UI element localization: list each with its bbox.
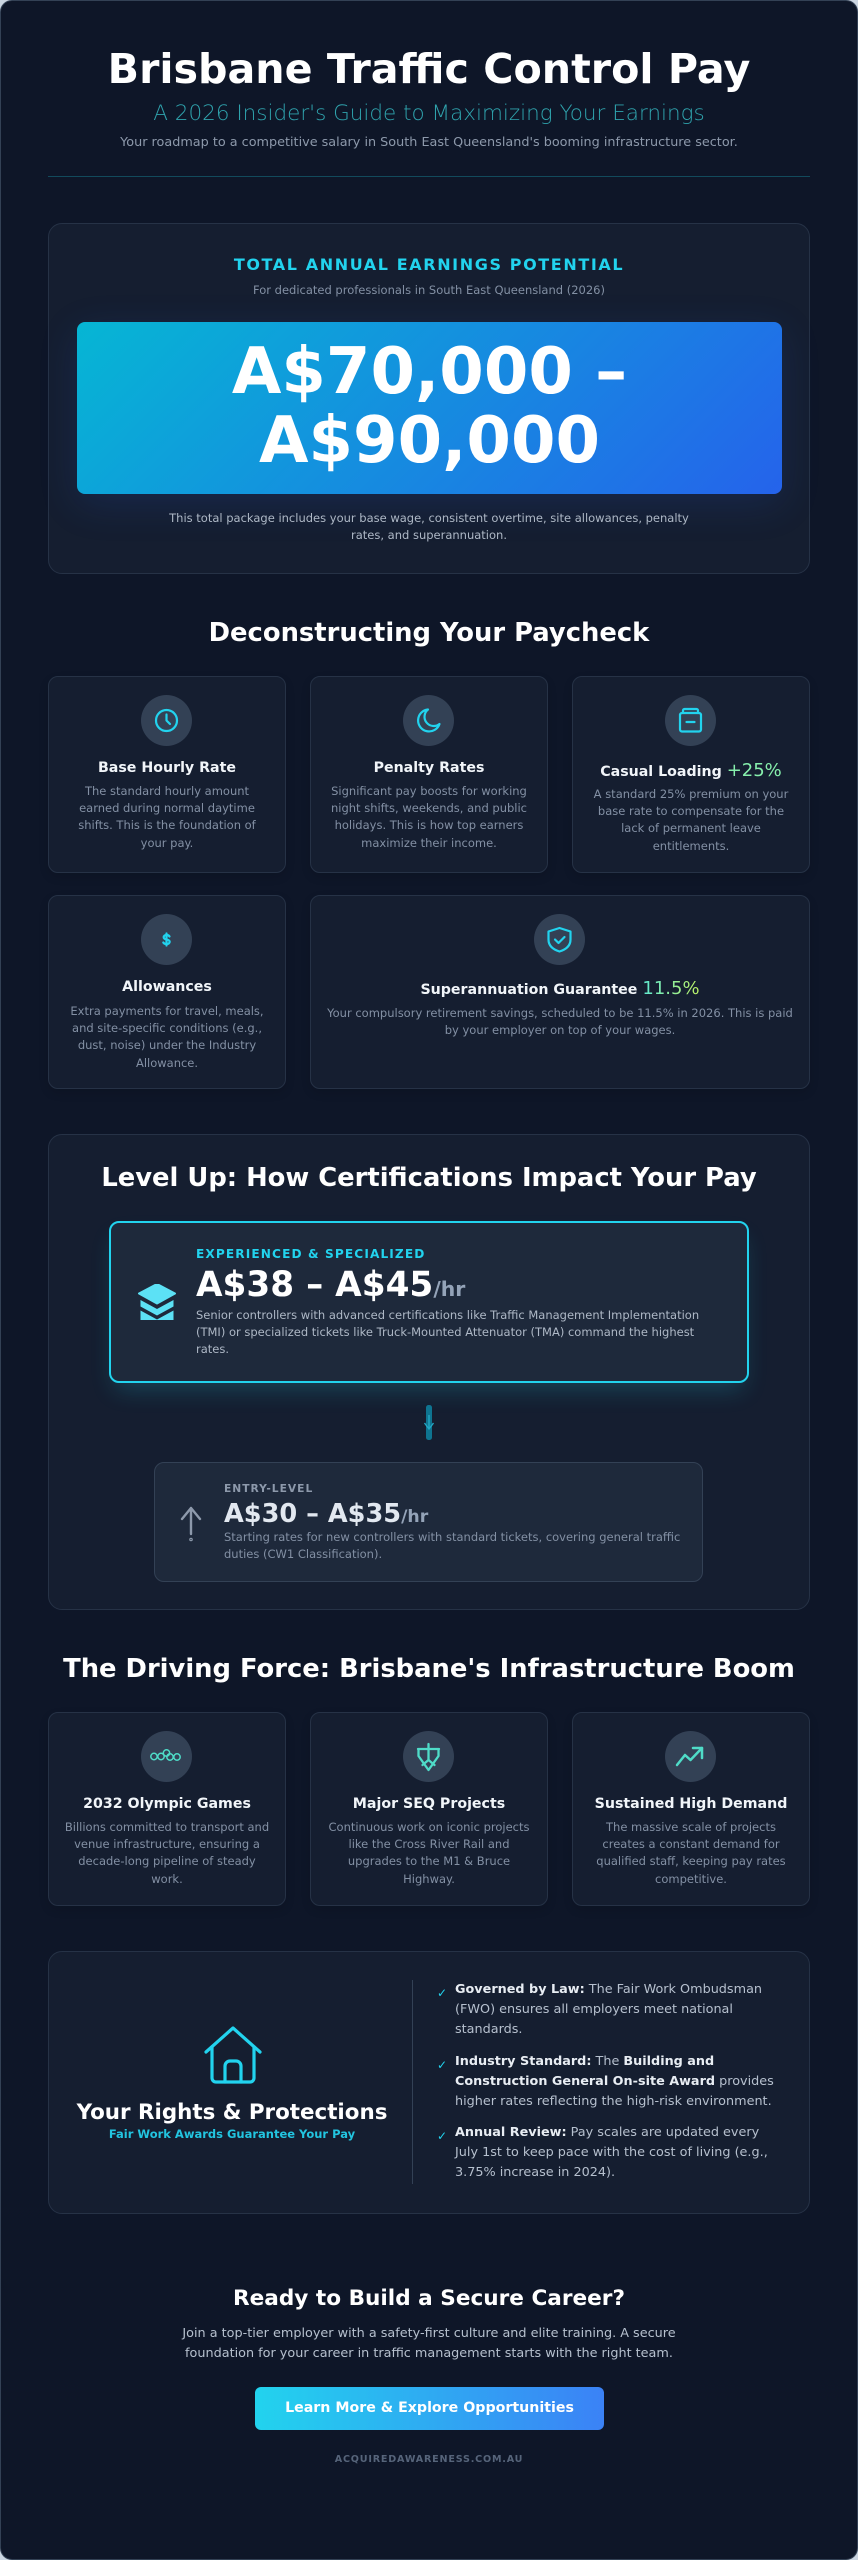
list item: governed by law: (FWO) ensures all employers meet national — [455, 2002, 733, 2017]
list item: governed by law: Governed by Law: The Fair Work Ombudsman — [455, 1982, 762, 1997]
tier description: Starting rates for new controllers with standard tickets, covering general traffic — [224, 1530, 680, 1544]
card description: A standard 25% premium on your — [594, 787, 788, 801]
earnings range banner — [77, 322, 782, 494]
card title: Allowances — [122, 979, 212, 995]
cta heading: Ready to Build a Secure Career? — [233, 2286, 625, 2311]
heading: driving force: The Driving Force: Brisbane's Infrastructure Boom — [63, 1654, 795, 1684]
earnings range figure: A$70,000 – — [232, 335, 627, 409]
list item: industry standard: Industry Standard: The Building and — [455, 2054, 714, 2069]
card description: earned during normal daytime — [79, 801, 255, 815]
tier description: Senior controllers with advanced certifications like Traffic Management Implementation — [196, 1308, 699, 1322]
card description: work. — [151, 1872, 183, 1886]
tier label: EXPERIENCED & SPECIALIZED — [196, 1247, 425, 1261]
rights subheading: Fair Work Awards Guarantee Your Pay — [109, 2127, 355, 2141]
card description — [328, 1820, 530, 1886]
card description — [594, 787, 788, 853]
list item: annual review: 3.75% increase in 2024). — [455, 2165, 615, 2180]
icon: wallet — [665, 695, 716, 746]
earnings range figure: A$90,000 — [259, 404, 600, 478]
cta text: Join a top-tier employer with a safety-first culture and elite training. A secure — [182, 2326, 676, 2341]
icon: house — [204, 2026, 262, 2084]
card: base hourly rate — [48, 676, 286, 873]
earnings label: TOTAL ANNUAL EARNINGS POTENTIAL — [234, 255, 624, 274]
list item: annual review: July 1st to keep pace with the cost of living (e.g., — [455, 2145, 768, 2160]
card description: Extra payments for travel, meals, — [70, 1004, 264, 1018]
card description: qualified staff, keeping pay rates — [596, 1854, 786, 1868]
check mark: ✓ — [437, 2129, 447, 2143]
card description: decade-long pipeline of steady — [78, 1854, 256, 1868]
icon: rings — [141, 1731, 192, 1782]
card: casual loading — [572, 676, 810, 873]
card: olympic games — [48, 1712, 286, 1906]
card description: dust, noise) under the Industry — [78, 1038, 256, 1052]
card: sustained high demand — [572, 1712, 810, 1906]
cta text: foundation for your career in traffic management starts with the right team. — [185, 2346, 673, 2361]
tier: experienced — [109, 1221, 749, 1383]
tier: entry level — [154, 1462, 703, 1582]
icon: crane anchor — [403, 1731, 454, 1782]
list item: governed by law: standards. — [455, 2022, 522, 2037]
card description: Highway. — [403, 1872, 455, 1886]
card description: holidays. This is how top earners — [335, 818, 523, 832]
card description: shifts. This is the foundation of — [78, 818, 256, 832]
earnings sublabel: For dedicated professionals in South East Queensland (2026) — [253, 283, 605, 297]
card description — [327, 1006, 793, 1037]
card description: venue infrastructure, ensuring a — [74, 1837, 260, 1851]
list item: governed by law — [455, 1982, 762, 2037]
card description: lack of permanent leave — [621, 821, 761, 835]
card description: base rate to compensate for the — [598, 804, 784, 818]
card description: and site-specific conditions (e.g., — [72, 1021, 262, 1035]
tagline: Your roadmap to a competitive salary in South East Queensland's booming infrastructure sector. — [120, 135, 738, 150]
cta button — [255, 2387, 604, 2430]
card title: Major SEQ Projects — [353, 1796, 505, 1812]
card description — [596, 1820, 786, 1886]
heading: deconstructing: Deconstructing Your Paycheck — [209, 618, 649, 648]
card: allowances — [48, 895, 286, 1089]
cta button: Learn More & Explore Opportunities — [285, 2400, 574, 2416]
card description — [78, 784, 256, 850]
card description: like the Cross River Rail and — [348, 1837, 510, 1851]
card title: 2032 Olympic Games — [83, 1796, 251, 1812]
card description: night shifts, weekends, and public — [331, 801, 527, 815]
card description: entitlements. — [653, 839, 729, 853]
footer source: ACQUIREDAWARENESS.COM.AU — [335, 2454, 523, 2465]
check mark: ✓ — [437, 2058, 447, 2072]
panel: certifications — [48, 1134, 810, 1610]
tier label: ENTRY-LEVEL — [224, 1482, 313, 1495]
earnings note — [169, 511, 689, 542]
tier description — [196, 1308, 699, 1356]
card title: Base Hourly Rate — [98, 760, 236, 776]
card description: Significant pay boosts for working — [331, 784, 527, 798]
card title: Penalty Rates — [374, 760, 484, 776]
panel: total annual earnings — [48, 223, 810, 574]
card description — [331, 784, 527, 850]
card: penalty rates — [310, 676, 548, 873]
card title: Sustained High Demand — [595, 1796, 787, 1812]
icon: moon — [403, 695, 454, 746]
card description: competitive. — [655, 1872, 727, 1886]
icon: up arrow — [180, 1506, 202, 1542]
tier description — [224, 1530, 680, 1561]
rights heading: Your Rights & Protections — [77, 2100, 387, 2125]
title: Brisbane Traffic Control Pay — [108, 45, 750, 93]
card description — [70, 1004, 264, 1070]
icon: shield — [534, 914, 585, 965]
tier price: A$30 – A$35/hr — [224, 1499, 428, 1529]
earnings range figure — [232, 335, 627, 478]
card description: your pay. — [141, 836, 193, 850]
tier description: duties (CW1 Classification). — [224, 1547, 382, 1561]
list item: industry standard: higher rates reflecting the high-risk environment. — [455, 2094, 772, 2109]
panel: rights and protections — [48, 1951, 810, 2214]
card: major seq projects — [310, 1712, 548, 1906]
card title: Casual Loading +25% — [600, 760, 782, 781]
icon: dollar — [141, 914, 192, 965]
list item: annual review — [454, 2125, 768, 2180]
tier price: A$38 – A$45/hr — [196, 1265, 465, 1305]
card description — [65, 1820, 269, 1886]
cta text — [182, 2326, 676, 2361]
card description: Billions committed to transport and — [65, 1820, 269, 1834]
card description: upgrades to the M1 & Bruce — [348, 1854, 510, 1868]
icon: layers — [138, 1284, 176, 1320]
card description: maximize their income. — [361, 836, 497, 850]
list item: industry standard — [455, 2054, 774, 2109]
card description: The massive scale of projects — [606, 1820, 776, 1834]
earnings note: This total package includes your base wage, consistent overtime, site allowances, penalty — [169, 511, 689, 525]
tier description: (TMI) or specialized tickets like Truck-Mounted Attenuator (TMA) command the highest — [196, 1325, 694, 1339]
subtitle: A 2026 Insider's Guide to Maximizing Your Earnings — [153, 101, 705, 126]
check mark: ✓ — [437, 1986, 447, 2000]
card description: Continuous work on iconic projects — [328, 1820, 530, 1834]
list item: annual review: Annual Review: Pay scales are updated every — [455, 2125, 759, 2140]
card description: Allowance. — [136, 1056, 198, 1070]
card description: Your compulsory retirement savings, scheduled to be 11.5% in 2026. This is paid — [327, 1006, 793, 1020]
card: superannuation guarantee — [310, 895, 810, 1089]
icon: trending up — [665, 1731, 716, 1782]
card title: Superannuation Guarantee 11.5% — [420, 978, 700, 999]
icon: clock — [141, 695, 192, 746]
tier description: rates. — [196, 1342, 229, 1356]
arrow: down connector — [424, 1405, 434, 1440]
card description: by your employer on top of your wages. — [445, 1023, 675, 1037]
earnings note: rates, and superannuation. — [351, 528, 507, 542]
card description: creates a constant demand for — [602, 1837, 780, 1851]
heading: level up: Level Up: How Certifications Impact Your Pay — [101, 1163, 757, 1193]
card description: The standard hourly amount — [85, 784, 249, 798]
list item: industry standard: Construction General On-site Award provides — [455, 2074, 774, 2089]
